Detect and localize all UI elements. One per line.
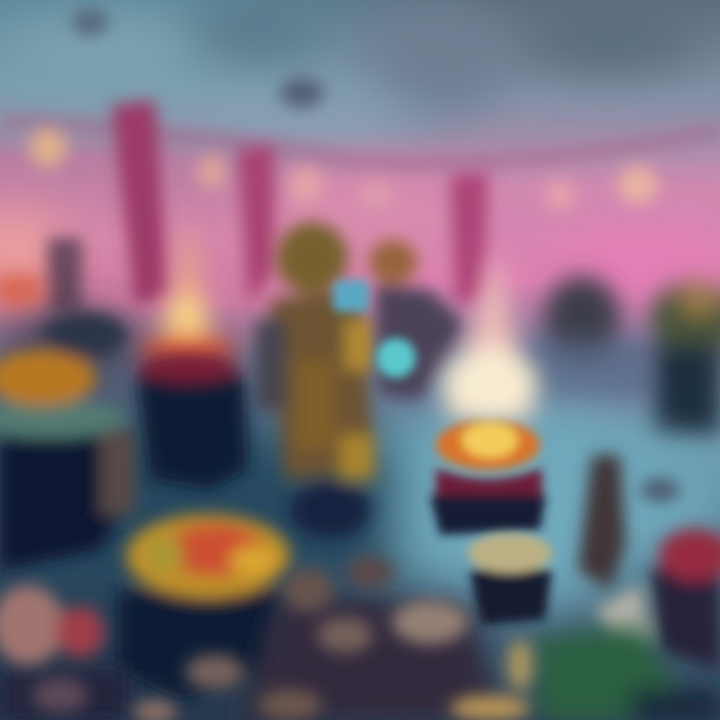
right distant trees (520, 276, 720, 435)
green leaves (535, 625, 720, 720)
hanging banners (48, 100, 488, 313)
right cauldron with flames (430, 420, 546, 535)
left cauldron (136, 354, 248, 490)
turquoise highlights (333, 280, 416, 378)
cream bowl (468, 533, 552, 625)
foreground bread and snacks (0, 556, 533, 720)
ground (0, 317, 720, 610)
left fire glow (0, 220, 236, 365)
second figure beside the central one (369, 240, 465, 400)
clouds and soft glow in the sky (0, 0, 720, 300)
food bowl center-left (118, 514, 290, 700)
string of lanterns (0, 120, 720, 211)
central figure (256, 222, 375, 538)
right red-topped pot (595, 529, 720, 670)
flying birds (72, 8, 324, 108)
dark table with food in the foreground (0, 590, 500, 720)
large far-left pot with food (0, 313, 135, 570)
right fire glow (442, 250, 538, 423)
bottle on the right (578, 455, 680, 590)
